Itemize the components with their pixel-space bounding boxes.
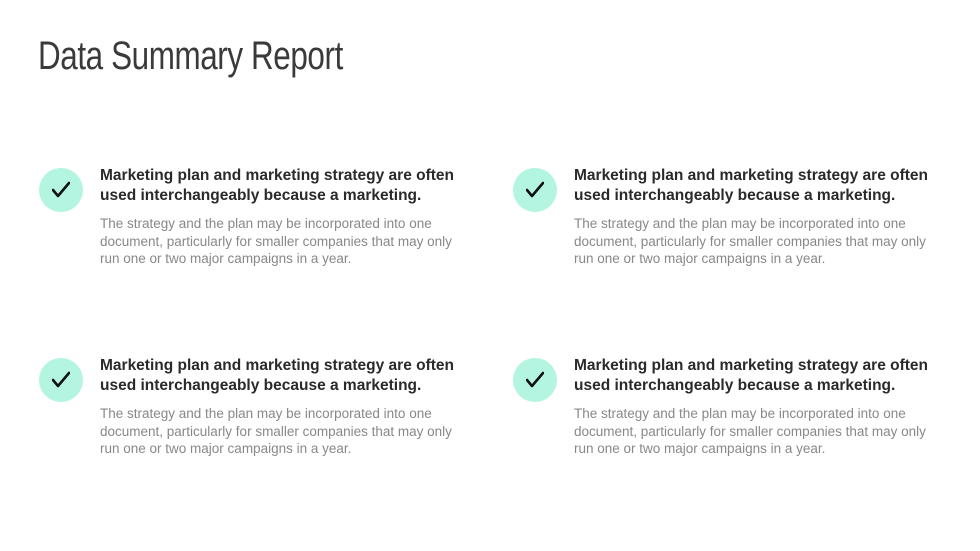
body text: document, particularly for smaller companies that may only — [100, 234, 452, 248]
heading: used interchangeably because a marketing. — [574, 377, 895, 394]
icon: check — [39, 168, 83, 212]
body text: run one or two major campaigns in a year. — [574, 441, 825, 456]
heading: used interchangeably because a marketing. — [574, 187, 895, 204]
body text: The strategy and the plan may be incorporated into one — [100, 216, 432, 231]
body text: The strategy and the plan may be incorporated into one — [100, 406, 432, 421]
item: top right — [513, 167, 928, 266]
heading — [100, 167, 454, 204]
title: Data Summary Report — [38, 34, 343, 78]
heading: used interchangeably because a marketing. — [100, 377, 421, 394]
icon: check — [513, 358, 557, 402]
body text: The strategy and the plan may be incorporated into one — [574, 216, 906, 231]
item: bottom left — [39, 357, 454, 456]
heading: Marketing plan and marketing strategy are often — [574, 357, 928, 374]
body text: run one or two major campaigns in a year. — [100, 251, 351, 266]
heading: Marketing plan and marketing strategy are often — [574, 167, 928, 184]
body text — [574, 406, 926, 456]
body text: document, particularly for smaller companies that may only — [100, 424, 452, 438]
body text — [100, 216, 452, 266]
heading: Marketing plan and marketing strategy are often — [100, 357, 454, 374]
body text — [574, 216, 926, 266]
item: top left — [39, 167, 454, 266]
heading — [100, 357, 454, 394]
item: bottom right — [513, 357, 928, 456]
heading: used interchangeably because a marketing. — [100, 187, 421, 204]
body text: run one or two major campaigns in a year. — [100, 441, 351, 456]
heading — [574, 167, 928, 204]
body text: document, particularly for smaller companies that may only — [574, 234, 926, 248]
body text: The strategy and the plan may be incorporated into one — [574, 406, 906, 421]
body text: run one or two major campaigns in a year. — [574, 251, 825, 266]
body text: document, particularly for smaller companies that may only — [574, 424, 926, 438]
heading: Marketing plan and marketing strategy are often — [100, 167, 454, 184]
body text — [100, 406, 452, 456]
heading — [574, 357, 928, 394]
icon: check — [513, 168, 557, 212]
icon: check — [39, 358, 83, 402]
